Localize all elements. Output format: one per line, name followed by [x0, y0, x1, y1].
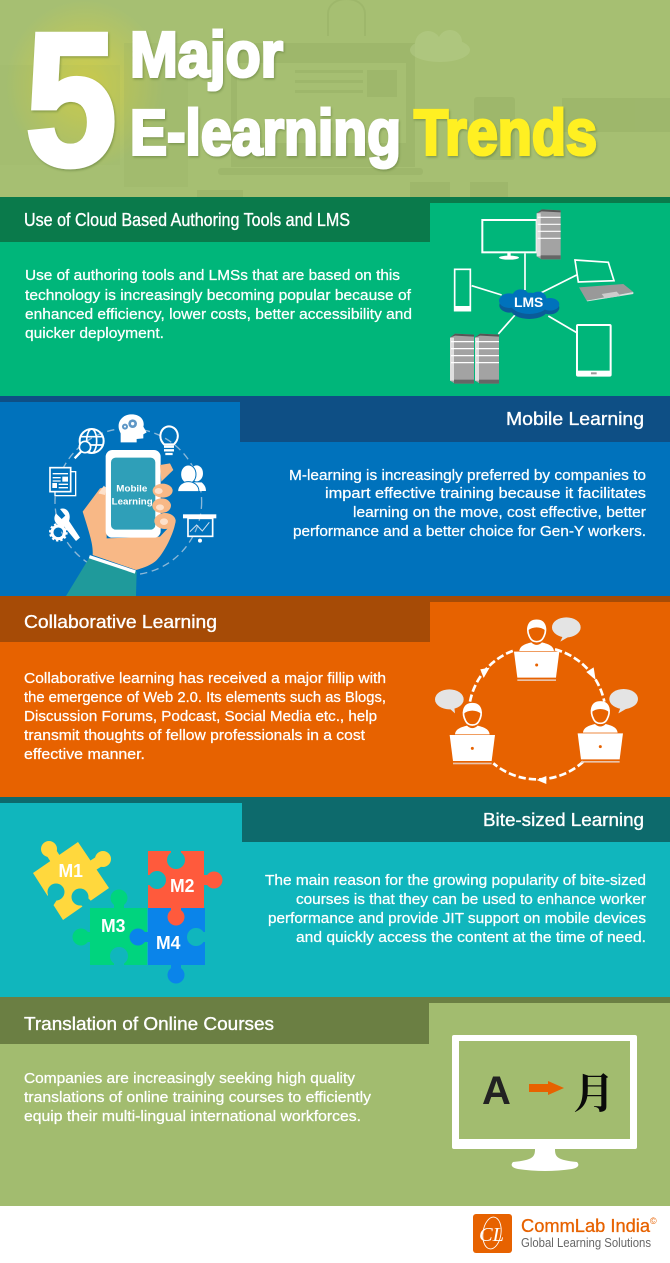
- speech bubbles: [435, 617, 638, 713]
- background illustration: laptop and icons: [0, 0, 670, 198]
- big numeral 5: 5: [25, 0, 117, 206]
- body text: performance and provide JIT support on mobile devices: [268, 911, 646, 927]
- phone label: Mobile: [116, 483, 147, 493]
- body text: effective manner.: [24, 747, 145, 763]
- person top: [514, 620, 559, 681]
- piece M4: M4: [156, 933, 180, 953]
- footer logo: [473, 1214, 657, 1253]
- tagline: Global Learning Solutions: [521, 1235, 651, 1250]
- piece M2: [147, 850, 222, 908]
- phone label: Learning: [112, 496, 153, 506]
- icon: collaboration cycle: [435, 617, 638, 784]
- body text: the emergence of Web 2.0. Its elements such as Blogs,: [24, 690, 386, 706]
- icon: chart board: [183, 514, 216, 543]
- letter A: A: [482, 1069, 511, 1113]
- body text: Use of authoring tools and LMSs that are based on this: [25, 268, 400, 284]
- heading: Collaborative Learning: [24, 612, 217, 632]
- title highlight: Trends: [414, 96, 597, 168]
- title line two: E-learning: [130, 96, 401, 168]
- body text: translations of online training courses to efficiently: [24, 1090, 372, 1106]
- body text: transmit thoughts of fellow professionals in a cost: [24, 728, 365, 744]
- piece M2: M2: [170, 876, 194, 896]
- body text: quicker deployment.: [25, 326, 164, 342]
- icon: puzzle pieces: [33, 841, 222, 984]
- body text: learning on the move, cost effective, better: [353, 505, 646, 521]
- logo mark: CL: [479, 1224, 504, 1246]
- header banner: [0, 0, 670, 206]
- heading: Translation of Online Courses: [24, 1014, 274, 1034]
- icon: wrench and gear: [50, 509, 80, 541]
- body text: [289, 468, 646, 540]
- body text: courses is that they can be used to enhance worker: [296, 892, 646, 908]
- body text: Companies are increasingly seeking high quality: [24, 1071, 356, 1087]
- body text: enhanced efficiency, lower costs, better accessibility and: [25, 307, 412, 323]
- body text: The main reason for the growing popularity of bite-sized: [265, 873, 646, 889]
- heading: Bite-sized Learning: [483, 810, 644, 830]
- icon: people: [178, 465, 206, 492]
- piece M1: M1: [58, 861, 83, 881]
- title line one: Major: [130, 18, 283, 90]
- panel: bite-sized learning: [0, 797, 670, 997]
- body text: [24, 1071, 372, 1125]
- cloud: LMS: [514, 294, 543, 310]
- body text: equip their multi-lingual international workforces.: [24, 1109, 361, 1125]
- icon: light bulb: [160, 426, 178, 454]
- icon: head with gears: [119, 414, 147, 442]
- panel: collaborative learning: [0, 596, 670, 797]
- body text: M-learning is increasingly preferred by companies to: [289, 468, 646, 484]
- panel: translation of online courses: [0, 997, 670, 1206]
- body text: technology is increasingly becoming popular because of: [25, 288, 412, 304]
- piece M3: M3: [101, 916, 126, 936]
- arrow: [529, 1081, 564, 1095]
- copyright: ©: [650, 1216, 657, 1226]
- icon: hand holding phone with surrounding icons: [50, 414, 216, 596]
- body text: Discussion Forums, Podcast, Social Media etc., help: [24, 709, 377, 725]
- panel: mobile learning: [0, 396, 670, 596]
- icon: monitor with translation: [452, 1035, 637, 1171]
- heading: Mobile Learning: [506, 409, 644, 429]
- body text: [265, 873, 646, 946]
- person left: [450, 704, 495, 764]
- phone label: [112, 483, 153, 506]
- body text: performance and a better choice for Gen-Y workers.: [293, 524, 646, 540]
- translated character: 月: [573, 1061, 615, 1121]
- body text: [25, 268, 412, 342]
- piece M4: [130, 904, 206, 984]
- body text: impart effective training because it facilitates: [325, 486, 646, 502]
- icon: document: [50, 468, 76, 496]
- icon: globe with magnifier: [75, 429, 104, 458]
- company name: CommLab India: [521, 1216, 651, 1236]
- body text: [24, 671, 386, 763]
- panel: cloud authoring tools and LMS: [0, 197, 670, 396]
- logo mark: [473, 1214, 512, 1253]
- heading: Use of Cloud Based Authoring Tools and LMS: [24, 210, 350, 230]
- body text: Collaborative learning has received a major fillip with: [24, 671, 386, 687]
- cloud: [499, 289, 559, 319]
- person right: [578, 702, 623, 763]
- body text: and quickly access the content at the time of need.: [296, 930, 646, 946]
- piece M3: [72, 890, 147, 966]
- icon: LMS network: [450, 209, 633, 384]
- piece M1: [33, 841, 111, 920]
